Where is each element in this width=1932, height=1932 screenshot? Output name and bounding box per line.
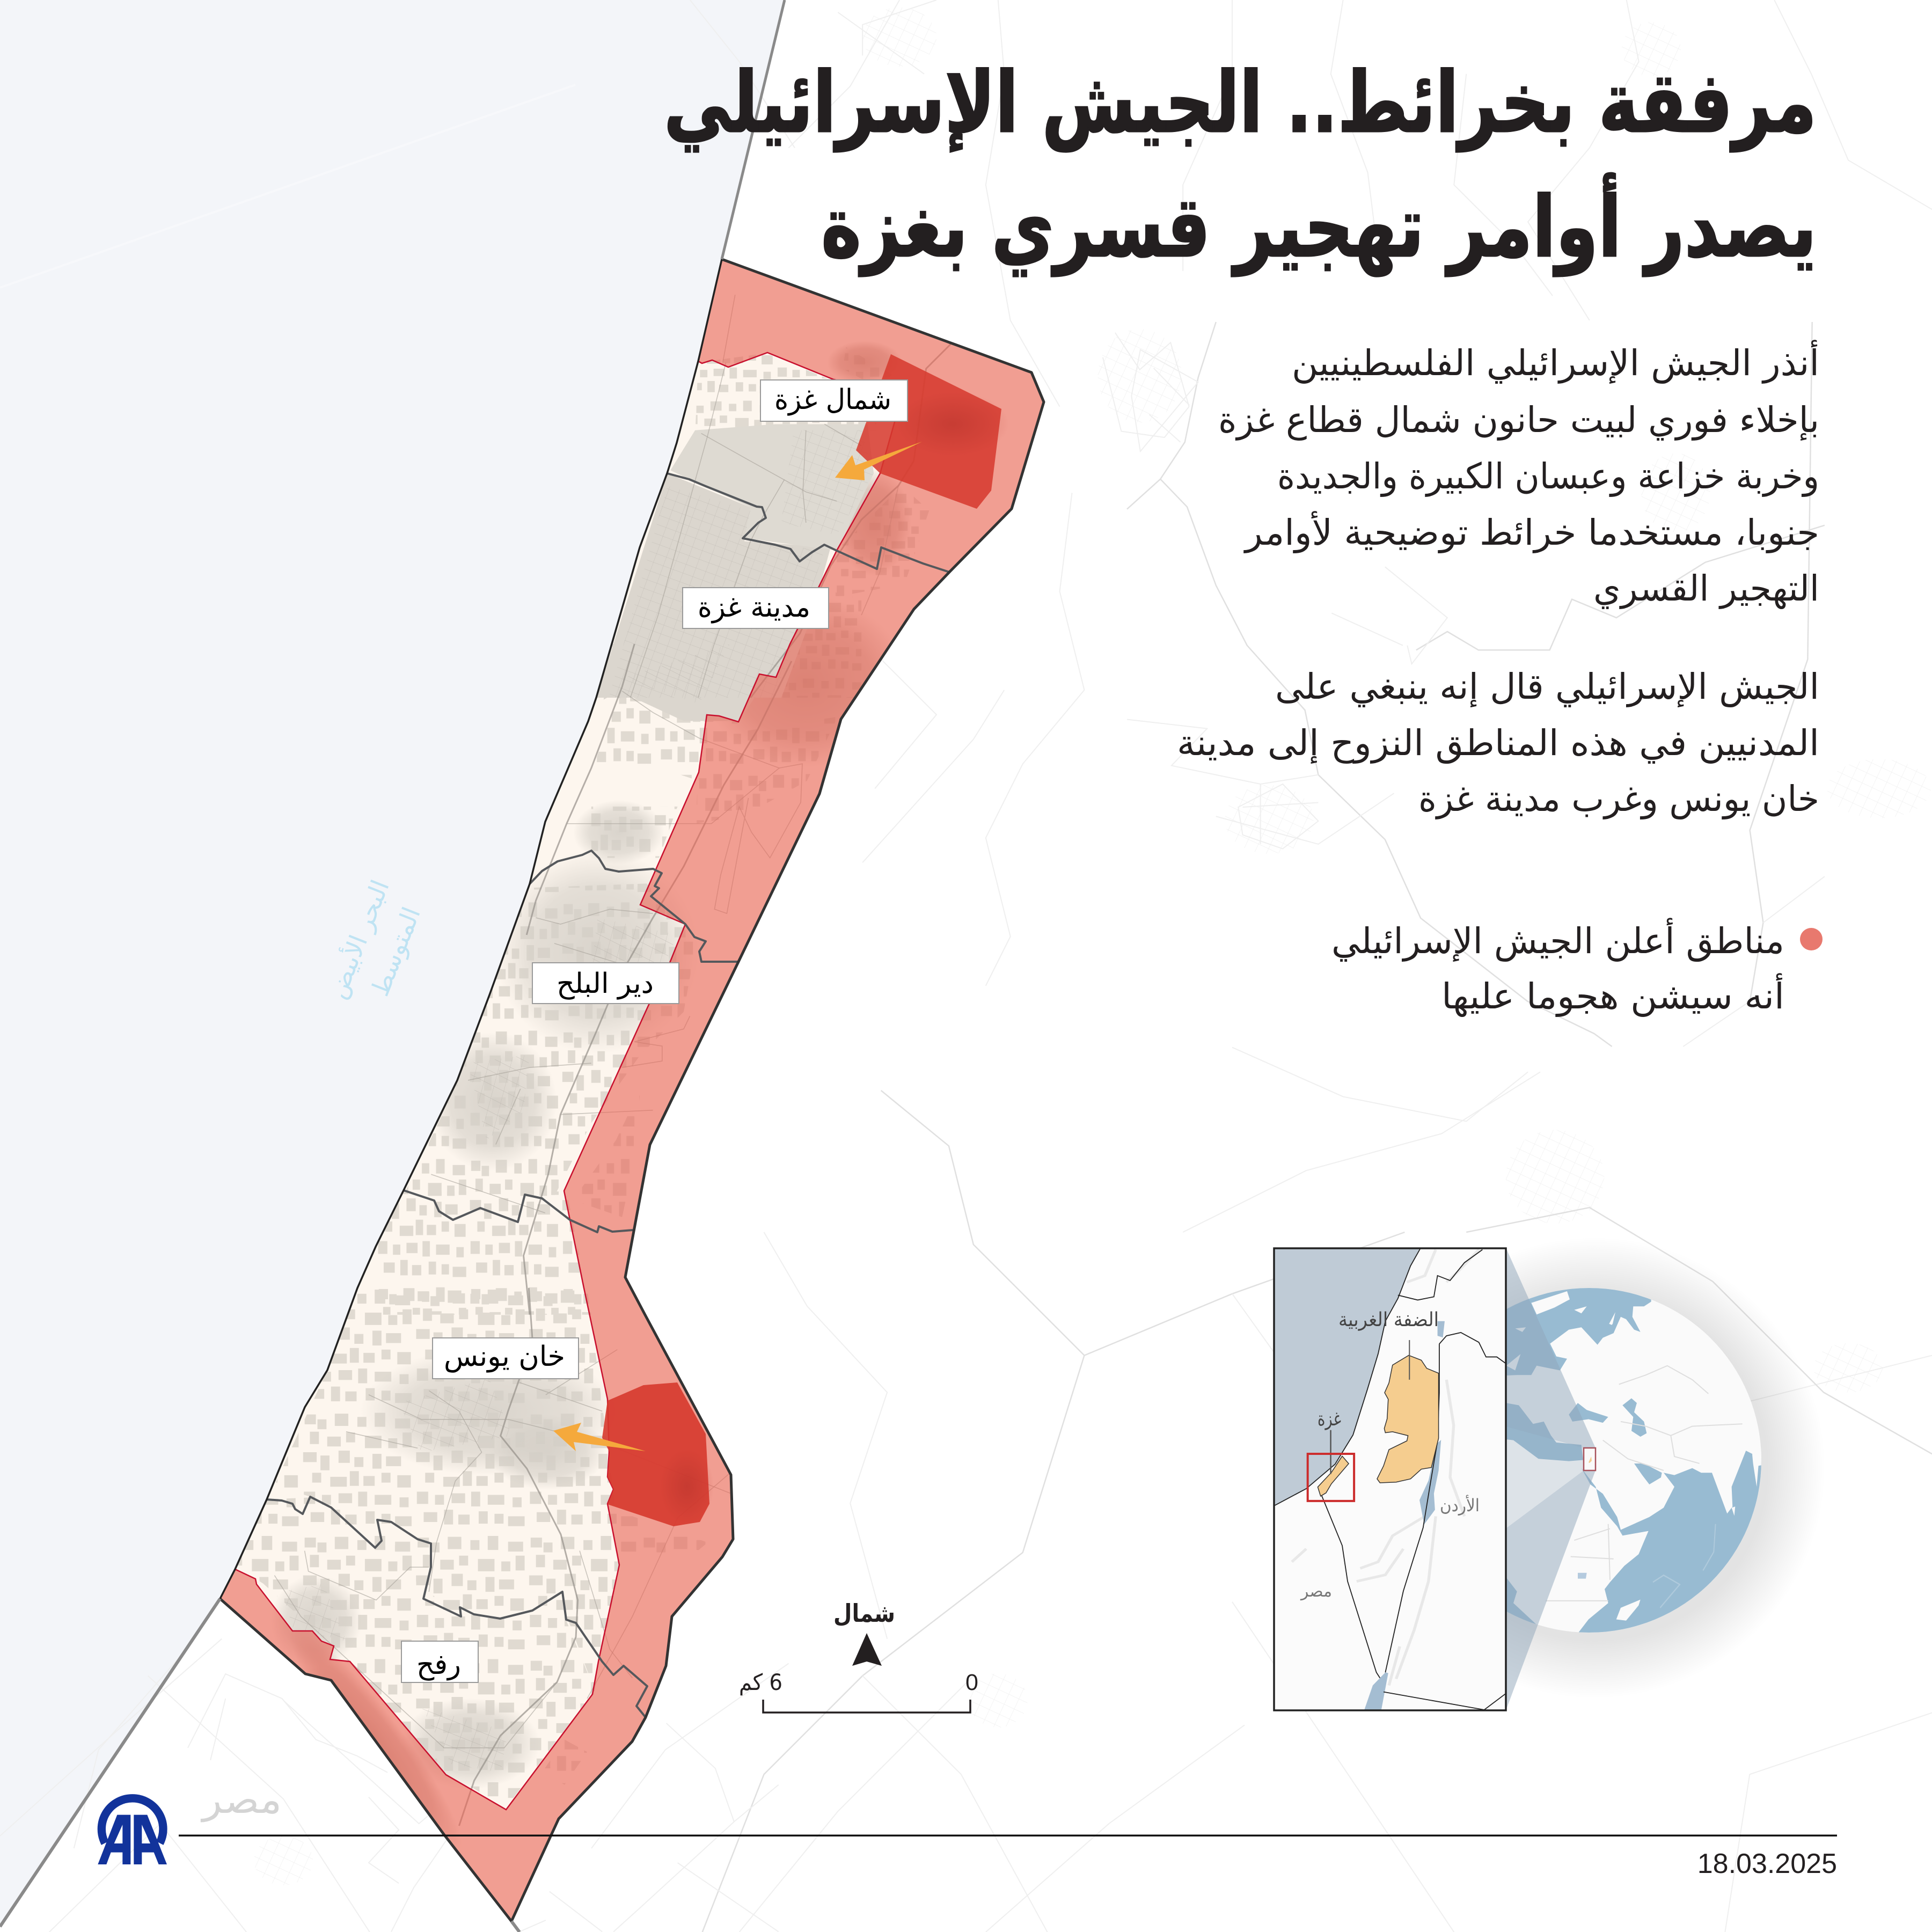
inset leader West Bank — [1409, 1340, 1410, 1380]
label: north Gaza: شمال غزة — [774, 384, 891, 416]
soft urban tone — [270, 800, 699, 1789]
body paragraph one: بإخلاء فوري لبيت حانون شمال قطاع غزة — [1218, 399, 1819, 441]
projection cone lower — [1506, 1470, 1596, 1710]
body paragraph two: المدنيين في هذه المناطق النزوح إلى مدينة — [1177, 722, 1819, 764]
built-up density — [237, 295, 951, 1866]
governorate boundaries — [267, 473, 949, 1717]
body paragraph two: الجيش الإسرائيلي قال إنه ينبغي على — [1275, 666, 1819, 708]
globe oceans — [1413, 1277, 1771, 1650]
body paragraph one: جنوبا، مستخدما خرائط توضيحية لأوامر — [1243, 510, 1819, 553]
inset sea — [1272, 1246, 1421, 1506]
label: Rafah — [401, 1641, 478, 1682]
darker town inside north attack zone — [896, 392, 1009, 456]
north arrow — [833, 1599, 895, 1666]
legend dot — [1800, 928, 1823, 950]
label: north Gaza — [760, 380, 908, 421]
sparse blocky built-up — [237, 347, 929, 1807]
title — [664, 54, 1817, 277]
body paragraph one: وخربة خزاعة وعبسان الكبيرة والجديدة — [1277, 456, 1819, 497]
scale bar: 0 — [965, 1670, 978, 1695]
body paragraph two — [1177, 666, 1819, 819]
scale bar — [739, 1669, 978, 1713]
inset label Jordan: الأردن — [1440, 1495, 1480, 1516]
darker town inside south attack zone — [660, 1449, 714, 1524]
label: Rafah: رفح — [416, 1649, 461, 1681]
locator globe — [1364, 1237, 1825, 1710]
strip land fill — [220, 259, 1044, 1921]
globe country borders — [1546, 1366, 1743, 1601]
inset leader Gaza — [1330, 1430, 1331, 1474]
coastline north of the strip — [722, 0, 785, 259]
body paragraph one: أنذر الجيش الإسرائيلي الفلسطينيين — [1292, 340, 1819, 384]
inset Gulf of Aqaba — [1364, 1672, 1388, 1711]
scale bar: 6 كم — [739, 1669, 782, 1696]
body paragraph one: التهجير القسري — [1593, 568, 1819, 609]
globe land — [1417, 1288, 1761, 1633]
attack zone north — [856, 354, 1001, 509]
warning zone overlay — [220, 259, 1044, 1921]
Gaza strip map — [0, 0, 1044, 1932]
arrow: north evacuation — [835, 442, 922, 480]
strip outline — [220, 259, 1044, 1921]
label: Khan Younis — [433, 1338, 579, 1379]
legend text: أنه سيشن هجوما عليها — [1441, 973, 1784, 1017]
legend text: مناطق أعلن الجيش الإسرائيلي — [1331, 918, 1784, 962]
inset label Gaza: غزة — [1318, 1408, 1341, 1430]
sea label: المتوسط — [365, 903, 427, 1000]
globe shadow — [1364, 1237, 1825, 1699]
legend — [1331, 918, 1823, 1017]
inset coast and borders — [1274, 1248, 1506, 1710]
inset Dead Sea and lakes — [1419, 1440, 1441, 1525]
projection cone middle — [1506, 1426, 1584, 1528]
sea label — [321, 875, 427, 1003]
globe ocean currents — [1653, 1524, 1716, 1608]
label: Deir al-Balah: دير البلح — [557, 968, 654, 1000]
inset Gaza — [1318, 1456, 1349, 1496]
globe islands and land masses — [1506, 1291, 1771, 1621]
inset terrain — [1292, 1249, 1479, 1686]
arrow: south evacuation — [553, 1423, 646, 1451]
body paragraph one — [1218, 340, 1819, 609]
north arrow: شمال — [833, 1599, 895, 1628]
warning zone red edge — [235, 353, 902, 1810]
street grids — [282, 430, 874, 1773]
faint Egypt label: مصر — [201, 1777, 282, 1823]
inset frame — [1274, 1248, 1506, 1710]
label: Deir al-Balah — [532, 963, 679, 1004]
coastline of the strip — [220, 259, 722, 1599]
sea label: البحر الأبيض — [321, 875, 396, 1003]
legend text — [1331, 918, 1784, 1017]
label: Khan Younis: خان يونس — [444, 1341, 565, 1373]
coastline south of the strip — [0, 1599, 220, 1927]
dark patches inside the warning zone — [271, 341, 911, 1866]
projection cone upper — [1506, 1248, 1596, 1448]
dense urban fill — [596, 424, 874, 721]
inset label West Bank: الضفة الغربية — [1338, 1309, 1439, 1331]
globe marker — [1584, 1448, 1596, 1470]
inset West Bank — [1377, 1355, 1439, 1483]
date: 18.03.2025 — [1697, 1848, 1837, 1879]
faint marine line — [0, 85, 575, 288]
sea — [0, 0, 785, 1927]
roads around Rafah — [188, 1674, 779, 1932]
body paragraph two: خان يونس وغرب مدينة غزة — [1418, 778, 1819, 819]
inset land — [1274, 1248, 1506, 1710]
inset red box — [1308, 1454, 1354, 1501]
border south of the strip — [511, 1921, 519, 1932]
attack zone south — [602, 1382, 709, 1526]
inset label Egypt: مصر — [1300, 1582, 1332, 1601]
label: Gaza city: مدينة غزة — [698, 591, 810, 624]
footer rule — [179, 1834, 1837, 1836]
streets of the strip — [274, 295, 951, 1826]
main roads at the text block — [1127, 322, 1825, 1046]
inset map — [1272, 1246, 1506, 1711]
logo: AA — [98, 1798, 167, 1864]
label: Gaza city — [683, 588, 829, 628]
